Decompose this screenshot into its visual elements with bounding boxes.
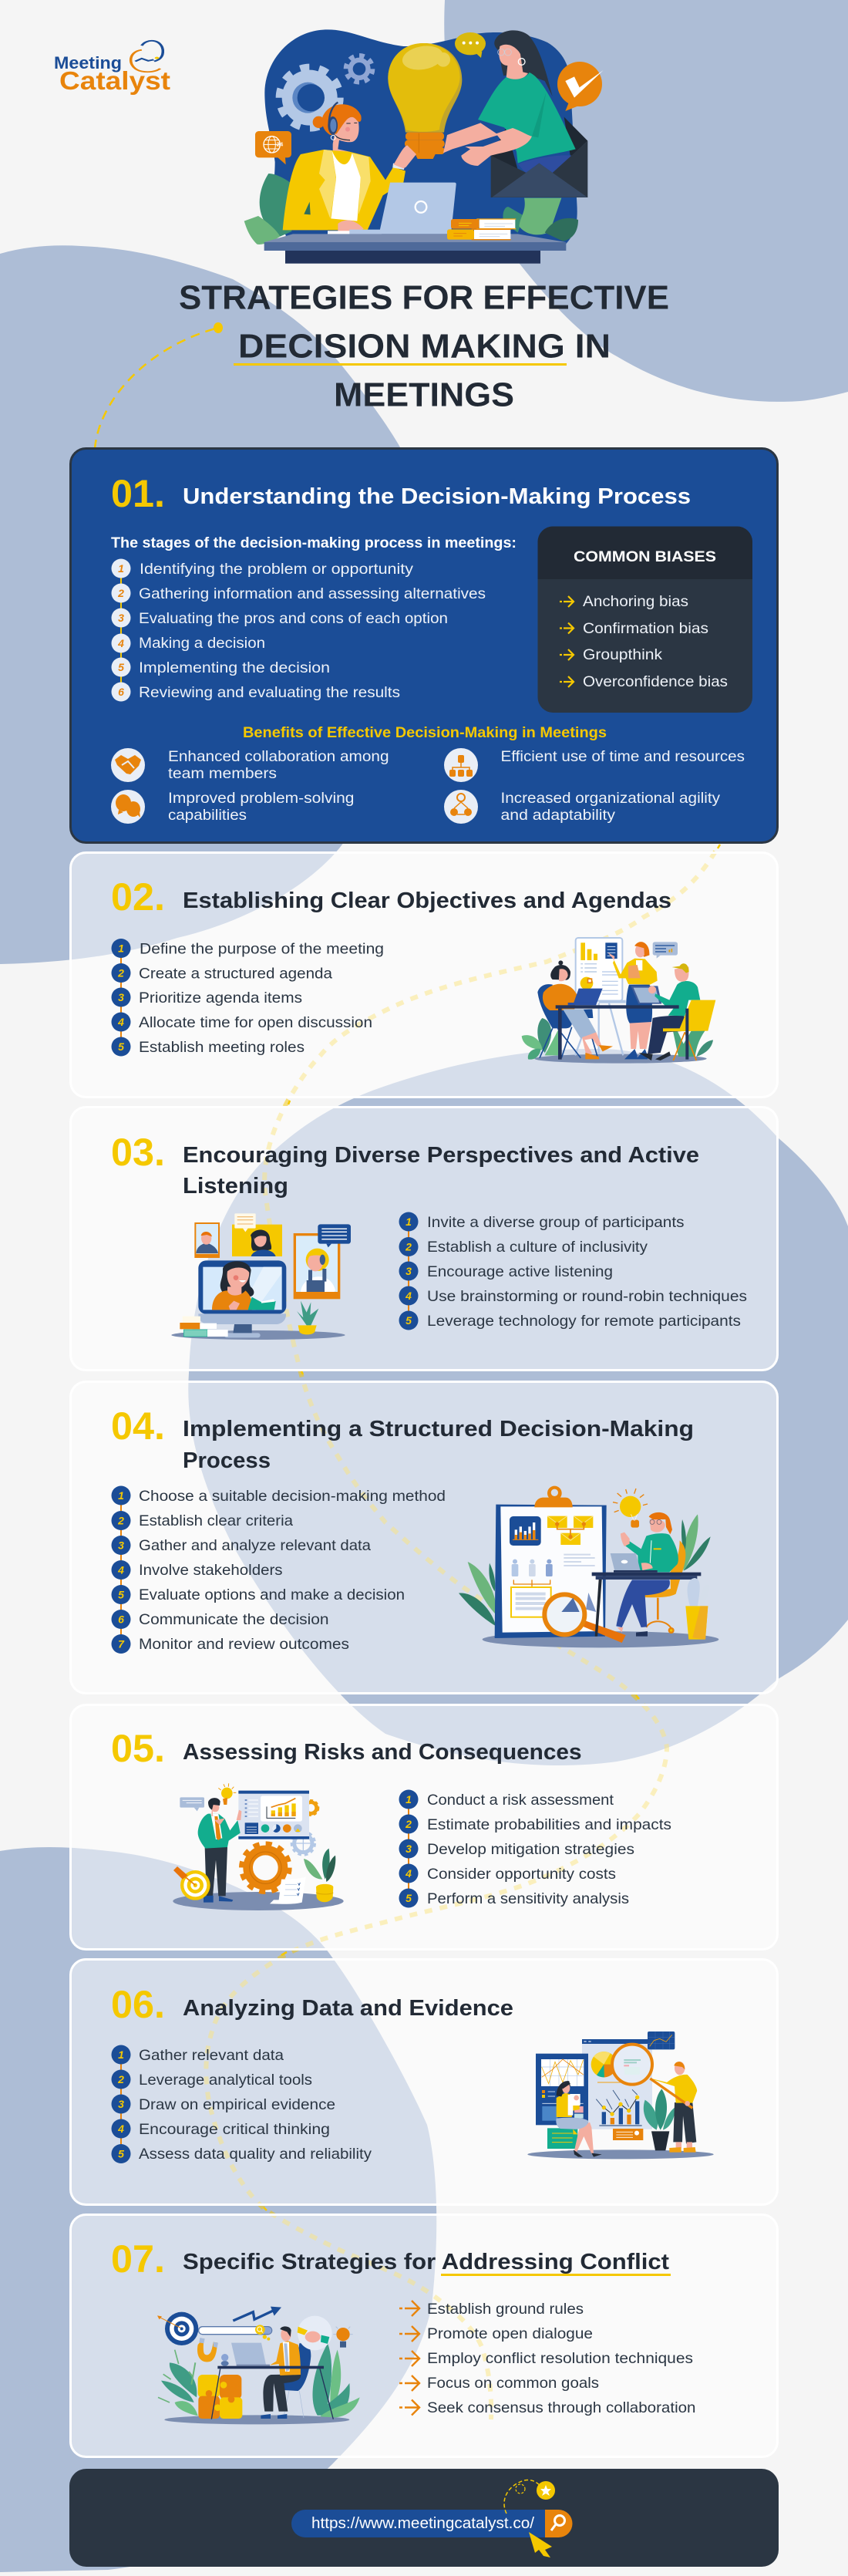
icon: star coin with dashed trail bbox=[504, 2480, 555, 2514]
list 06: Draw on empirical evidence bbox=[139, 2096, 335, 2113]
list 02: Create a structured agenda bbox=[139, 966, 332, 983]
icon: speech bubble bbox=[455, 32, 486, 58]
icon: magnifier bbox=[551, 2516, 564, 2530]
list 07 with arrows: Establish ground rules bbox=[427, 2301, 584, 2318]
list 06: Encourage critical thinking bbox=[139, 2121, 330, 2138]
number 07: 07. bbox=[111, 2237, 165, 2281]
panel 03: encouraging diverse perspectives and active listening bbox=[71, 1108, 777, 1370]
benefit: agility: and adaptability bbox=[501, 807, 615, 824]
list 07 with arrows: Promote open dialogue bbox=[427, 2325, 593, 2342]
list 03: Leverage technology for remote participants bbox=[427, 1313, 741, 1330]
benefit: collaboration: team members bbox=[168, 765, 277, 782]
list 06: 3 bbox=[118, 2098, 124, 2110]
benefit: problem solving: capabilities bbox=[168, 807, 247, 824]
stages list: 5 bbox=[118, 661, 124, 673]
list 05 bbox=[399, 1789, 671, 1908]
stages heading: The stages of the decision-making process in meetings: bbox=[111, 535, 517, 551]
list 04 bbox=[111, 1485, 446, 1654]
common biases box: Anchoring bias bbox=[583, 593, 688, 610]
list 05: Develop mitigation strategies bbox=[427, 1841, 634, 1858]
heading 07: Specific Strategies for Addressing Conflict bbox=[183, 2250, 670, 2274]
list 05: 1 bbox=[405, 1793, 412, 1806]
benefit: agility bbox=[444, 790, 720, 824]
illustration: team meeting bbox=[522, 938, 715, 1064]
stages list: 2 bbox=[117, 587, 124, 599]
list 02: Prioritize agenda items bbox=[139, 990, 302, 1006]
list 06: 5 bbox=[118, 2147, 124, 2160]
list 04: Gather and analyze relevant data bbox=[139, 1537, 371, 1554]
stages list: Implementing the decision bbox=[139, 659, 330, 676]
list 03: 4 bbox=[405, 1290, 412, 1302]
list 07 with arrows bbox=[399, 2301, 695, 2416]
list 02: Define the purpose of the meeting bbox=[140, 941, 384, 958]
logo wordmark bbox=[54, 53, 170, 95]
list 06 bbox=[111, 2045, 372, 2163]
icon: globe badge: 24 bbox=[277, 140, 284, 147]
list 06: 1 bbox=[118, 2048, 124, 2061]
heading 04: Implementing a Structured Decision-Making bbox=[183, 1417, 694, 1441]
laptop bbox=[349, 183, 456, 234]
list 03: Invite a diverse group of participants bbox=[427, 1214, 685, 1231]
heading 06: Analyzing Data and Evidence bbox=[183, 1996, 513, 2021]
title: DECISION MAKING IN bbox=[238, 329, 611, 366]
list 03: 1 bbox=[405, 1216, 412, 1228]
common biases box: Groupthink bbox=[583, 646, 662, 663]
number 02: 02. bbox=[111, 875, 165, 919]
common biases box: Overconfidence bias bbox=[583, 673, 728, 690]
list 05: 4 bbox=[405, 1867, 412, 1880]
common biases box bbox=[538, 526, 752, 713]
logo bbox=[131, 41, 163, 72]
list 05: 5 bbox=[405, 1892, 412, 1904]
list 07 with arrows: Employ conflict resolution techniques bbox=[427, 2350, 693, 2367]
list 06: 2 bbox=[117, 2073, 124, 2085]
panel 06: analyzing data and evidence bbox=[71, 1959, 777, 2204]
list 02: Allocate time for open discussion bbox=[139, 1014, 372, 1031]
panel 07: specific strategies for addressing conflict bbox=[71, 2215, 777, 2457]
illustration: risk analysis bbox=[173, 1783, 344, 1910]
list 02: 1 bbox=[118, 942, 124, 955]
list 03: 5 bbox=[405, 1314, 412, 1327]
list 04: Monitor and review outcomes bbox=[139, 1636, 349, 1653]
benefits heading: Benefits of Effective Decision-Making in Meetings bbox=[243, 725, 607, 741]
icon: large gear bbox=[279, 67, 340, 128]
title bbox=[179, 279, 669, 413]
logo mark bbox=[131, 41, 163, 72]
list 04: Evaluate options and make a decision bbox=[139, 1586, 405, 1603]
heading underline bbox=[441, 2274, 671, 2276]
title: STRATEGIES FOR EFFECTIVE bbox=[179, 279, 669, 316]
list 02: Establish meeting roles bbox=[139, 1039, 305, 1056]
list 02: 3 bbox=[118, 991, 124, 1003]
benefit: problem solving bbox=[111, 790, 355, 824]
stages list bbox=[111, 558, 486, 702]
benefit: collaboration: Enhanced collaboration among bbox=[168, 748, 389, 765]
benefit: efficient use of time: Efficient use of time and resources bbox=[501, 748, 745, 765]
illustration: structured process board bbox=[459, 1486, 718, 1647]
stages list: 6 bbox=[118, 686, 124, 698]
list 03: Establish a culture of inclusivity bbox=[427, 1239, 648, 1256]
hero illustration bbox=[244, 29, 604, 264]
stages list: 1 bbox=[118, 562, 124, 575]
benefit: efficient use of time bbox=[444, 748, 745, 782]
list 06: 4 bbox=[117, 2123, 124, 2135]
list 04: 6 bbox=[118, 1613, 124, 1626]
desk bbox=[264, 234, 566, 264]
list 04: 5 bbox=[118, 1589, 124, 1601]
common biases box: Confirmation bias bbox=[583, 620, 708, 637]
number 03: 03. bbox=[111, 1131, 165, 1174]
benefit: collaboration bbox=[111, 748, 389, 782]
number 01: 01. bbox=[111, 472, 165, 515]
list 04: Communicate the decision bbox=[139, 1611, 328, 1628]
woman in green and envelope bbox=[443, 30, 587, 197]
stages list: Reviewing and evaluating the results bbox=[139, 684, 400, 701]
stages list: 4 bbox=[117, 637, 124, 649]
list 05: 2 bbox=[405, 1818, 412, 1830]
list 03: Use brainstorming or round-robin techniques bbox=[427, 1288, 747, 1305]
heading 01: Understanding the Decision-Making Process bbox=[183, 484, 691, 509]
panel 05: assessing risks and consequences bbox=[71, 1704, 777, 1950]
woman at laptop bbox=[283, 103, 416, 234]
illustration: data analysis bbox=[527, 2031, 714, 2159]
panel 01: understanding the decision-making process bbox=[71, 449, 777, 842]
list 02: 4 bbox=[117, 1016, 124, 1028]
illustration: conflict resolution bbox=[157, 2307, 360, 2424]
stages list: 3 bbox=[118, 612, 124, 624]
stages list: Making a decision bbox=[139, 635, 265, 652]
list 07 with arrows: Seek consensus through collaboration bbox=[427, 2399, 695, 2416]
list 04: 4 bbox=[117, 1564, 124, 1576]
list 03: Encourage active listening bbox=[427, 1263, 613, 1280]
list 04: 7 bbox=[118, 1638, 125, 1650]
list 03 bbox=[399, 1212, 747, 1330]
list 04: 1 bbox=[118, 1489, 124, 1502]
list 06: Gather relevant data bbox=[139, 2047, 284, 2064]
common biases box: COMMON BIASES bbox=[574, 549, 716, 565]
logo wordmark: Catalyst bbox=[59, 66, 170, 95]
list 05: Conduct a risk assessment bbox=[427, 1792, 614, 1809]
list 05: 3 bbox=[405, 1843, 412, 1855]
panel 02: establishing clear objectives and agendas bbox=[71, 853, 777, 1097]
icon: light bulb bbox=[388, 43, 462, 159]
list 04: Choose a suitable decision-making method bbox=[139, 1488, 446, 1505]
list 02: 2 bbox=[117, 967, 124, 979]
list 02 bbox=[111, 939, 384, 1057]
plants bbox=[244, 174, 578, 244]
number 04: 04. bbox=[111, 1404, 165, 1448]
panel 03: encouraging diverse perspectives and active listening: Listening bbox=[183, 1174, 288, 1199]
list 05: Perform a sensitivity analysis bbox=[427, 1890, 629, 1907]
icon: globe badge bbox=[255, 131, 291, 164]
number 05: 05. bbox=[111, 1727, 165, 1770]
heading 03: Encouraging Diverse Perspectives and Active bbox=[183, 1143, 699, 1168]
icon: cursor bbox=[529, 2532, 552, 2557]
books bbox=[447, 219, 516, 240]
list 04: Involve stakeholders bbox=[139, 1562, 283, 1579]
panel 04: implementing a structured decision-making process: Process bbox=[183, 1448, 271, 1473]
icon: check mark badge bbox=[557, 62, 604, 111]
list 04: 2 bbox=[117, 1515, 124, 1527]
list 04: Establish clear criteria bbox=[139, 1512, 293, 1529]
list 06: Leverage analytical tools bbox=[139, 2072, 312, 2089]
footer panel bbox=[69, 2469, 779, 2567]
heading 02: Establishing Clear Objectives and Agendas bbox=[183, 888, 671, 913]
list 03: 3 bbox=[405, 1265, 412, 1277]
stages list: Evaluating the pros and cons of each option bbox=[139, 610, 448, 627]
list 03: 2 bbox=[405, 1240, 412, 1253]
title: MEETINGS bbox=[334, 376, 514, 413]
list 05: Consider opportunity costs bbox=[427, 1866, 616, 1883]
url search bar bbox=[291, 2510, 572, 2537]
panel 04: implementing a structured decision-making process bbox=[71, 1382, 777, 1694]
dashed path: top bbox=[95, 322, 223, 449]
list 02: 5 bbox=[118, 1040, 124, 1053]
benefit: problem solving: Improved problem-solving bbox=[168, 790, 355, 807]
icon: small gear bbox=[346, 56, 372, 83]
list 05: Estimate probabilities and impacts bbox=[427, 1816, 671, 1833]
url search bar: https://www.meetingcatalyst.co/ bbox=[311, 2515, 534, 2532]
list 07 with arrows: Focus on common goals bbox=[427, 2375, 599, 2392]
list 04: 3 bbox=[118, 1539, 124, 1552]
stages list: Gathering information and assessing alternatives bbox=[139, 585, 486, 602]
heading 05: Assessing Risks and Consequences bbox=[183, 1740, 581, 1765]
list 06: Assess data quality and reliability bbox=[139, 2146, 372, 2163]
number 06: 06. bbox=[111, 1983, 165, 2026]
illustration: remote participants bbox=[171, 1213, 351, 1340]
logo wordmark: Meeting bbox=[54, 53, 122, 72]
stages list: Identifying the problem or opportunity bbox=[140, 561, 413, 578]
benefit: agility: Increased organizational agility bbox=[501, 790, 720, 807]
